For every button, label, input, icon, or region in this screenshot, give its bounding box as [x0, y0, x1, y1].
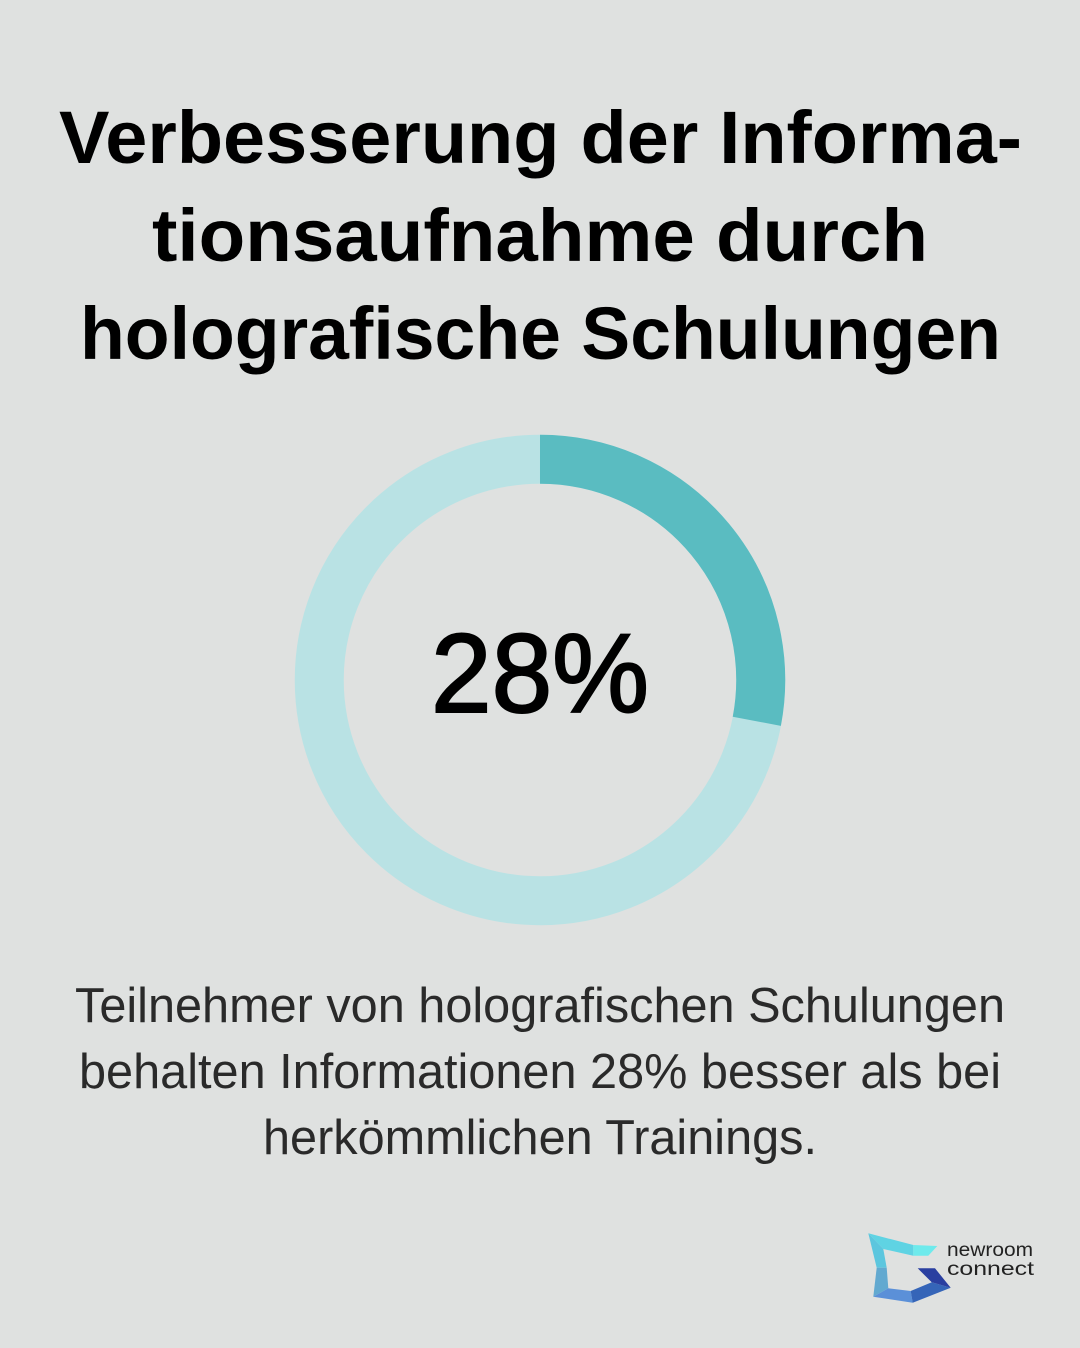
- title: tionsaufnahme durch: [152, 194, 928, 277]
- title: [59, 96, 1022, 375]
- donut track: [319, 459, 761, 901]
- description text: behalten Informationen 28% besser als bei: [79, 1045, 1001, 1099]
- title: holografische Schulungen: [80, 292, 1001, 375]
- title: Verbesserung der Informa-: [59, 96, 1022, 179]
- logo: newroom connect: [868, 1233, 1035, 1303]
- logo wordmark: [947, 1240, 1035, 1280]
- description text: Teilnehmer von holografischen Schulungen: [75, 979, 1005, 1033]
- description text: [75, 979, 1005, 1165]
- donut value segment: [540, 459, 761, 721]
- donut chart: 28%: [319, 459, 761, 901]
- logo wordmark: connect: [947, 1259, 1035, 1280]
- logo mark: [868, 1233, 951, 1303]
- description text: herkömmlichen Trainings.: [263, 1111, 817, 1165]
- center percentage: 28%: [431, 611, 649, 736]
- logo wordmark: newroom: [947, 1240, 1033, 1261]
